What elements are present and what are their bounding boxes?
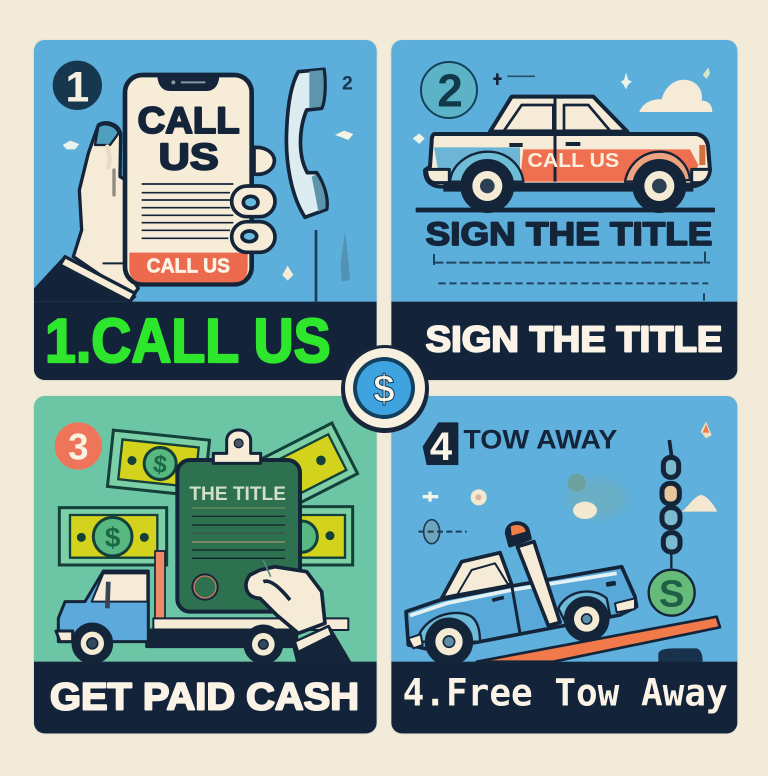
number badge 1 <box>53 61 102 111</box>
panel: step 4 free tow away <box>391 396 737 735</box>
icon: car <box>425 97 710 211</box>
sparkles <box>413 67 710 144</box>
icon: banknote middle right <box>286 507 353 565</box>
panel: step 1 call us <box>34 40 377 380</box>
number badge 2 <box>421 62 477 118</box>
icon: signing hand <box>246 560 350 663</box>
label: small 2: 2 <box>342 73 353 94</box>
footer label: 4.Free Tow Away: 4.Free Tow Away <box>403 671 728 715</box>
ground line <box>416 208 715 212</box>
icon: fingers <box>232 147 275 252</box>
footer band: step 4 <box>391 478 737 735</box>
footer band: step 1 <box>34 257 377 380</box>
icon: banknote top left <box>107 430 210 497</box>
icon: tow truck <box>406 523 637 664</box>
panel: step 2 sign the title <box>391 40 737 380</box>
heading: sign the title dark: SIGN THE TITLE <box>426 216 712 252</box>
footer band: step 2 <box>391 302 737 380</box>
signature dashed lines <box>433 252 710 301</box>
center dollar badge <box>341 345 429 433</box>
number badge 2: 2 <box>437 65 463 117</box>
icon: smartphone: US <box>159 136 219 178</box>
phone text lines <box>142 184 233 238</box>
clipboard title: THE TITLE <box>189 484 286 505</box>
icon: ramp <box>477 617 720 662</box>
number badge 1: 1 <box>65 63 89 111</box>
footer label: get paid cash: GET PAID CASH <box>50 677 359 719</box>
decorative small symbols <box>418 422 717 544</box>
footer band: step 3 <box>34 662 377 735</box>
footer label: 1.CALL US: 1.CALL US <box>45 307 331 376</box>
icon: hand holding phone <box>60 123 138 302</box>
icon: cloud <box>639 80 712 112</box>
icon: banknote top left: $ <box>152 451 169 479</box>
number 4 <box>423 422 458 469</box>
icon: banknote middle left <box>59 508 167 565</box>
phone button label: CALL US <box>147 255 230 277</box>
panel: step 3 get paid cash <box>34 396 377 735</box>
footer label: sign the title: SIGN THE TITLE <box>426 319 722 360</box>
icon: clipboard <box>177 430 300 612</box>
icon: banknote top right <box>261 423 358 510</box>
number badge 3: 3 <box>68 427 89 468</box>
icon: smartphone <box>125 75 252 284</box>
icon: flatbed truck <box>56 551 348 663</box>
number 4: 4 <box>430 425 453 469</box>
icon: banknote middle left: $ <box>105 522 121 553</box>
center dollar badge: $ <box>373 368 395 411</box>
phone headline: CALL <box>138 99 240 141</box>
decorative sparkles and antenna <box>63 131 353 302</box>
icon: chain with dollar coin: S <box>659 573 684 616</box>
car door label: CALL US <box>527 149 619 172</box>
icon: chain with dollar coin <box>649 440 695 616</box>
number badge 3 <box>55 422 102 470</box>
icon: telephone handset <box>286 69 327 217</box>
heading: tow away: TOW AWAY <box>463 424 618 454</box>
